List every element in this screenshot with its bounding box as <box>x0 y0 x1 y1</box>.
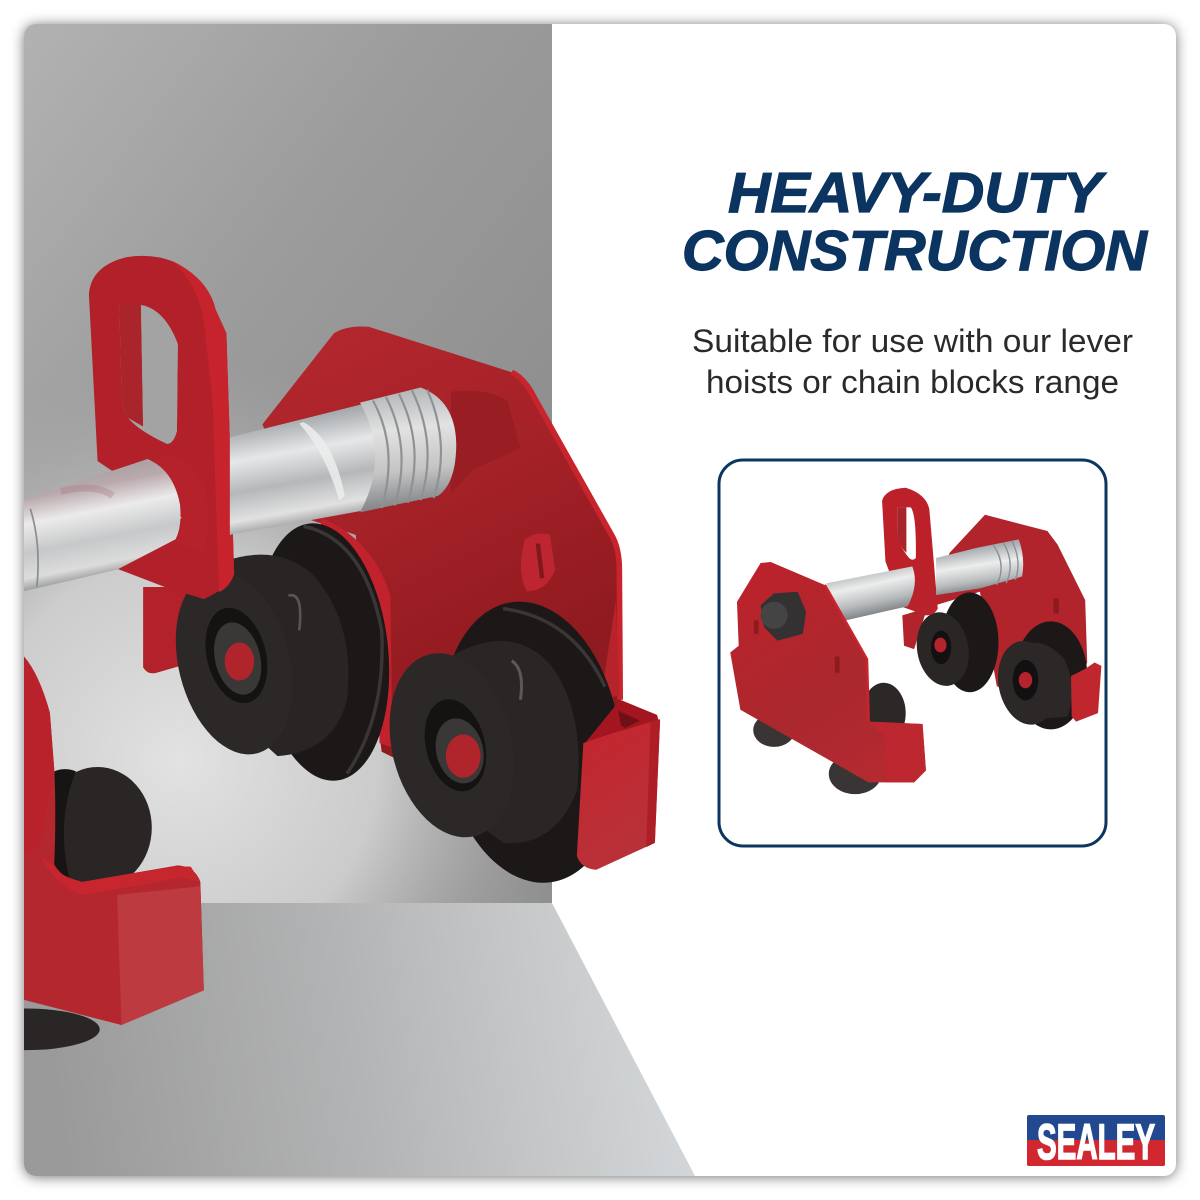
product close-up: girder trolley <box>0 256 660 1050</box>
back side plate <box>143 326 623 758</box>
inset: full product view <box>719 460 1106 846</box>
heading: HEAVY-DUTY <box>728 161 1107 225</box>
front lip <box>577 700 660 870</box>
front wheel <box>390 602 615 883</box>
description text <box>692 323 1133 400</box>
inset rear wheels <box>911 592 998 692</box>
inset back plate <box>902 515 1087 720</box>
rear wheel <box>176 523 390 781</box>
inset front wheel <box>992 621 1087 729</box>
inset front plate <box>730 562 926 782</box>
inset steel shaft <box>826 539 1023 622</box>
inset wheel lip <box>1071 663 1101 722</box>
inset plate slots <box>754 598 1059 673</box>
heading: CONSTRUCTION <box>682 219 1149 283</box>
steel shaft <box>24 387 456 591</box>
description text: Suitable for use with our lever <box>692 323 1133 359</box>
panel: studio background <box>24 24 695 1176</box>
description text: hoists or chain blocks range <box>706 364 1119 400</box>
inset near wheels <box>753 683 906 794</box>
left edge: near side plate and wheel <box>24 656 204 1050</box>
inset lifting eye <box>882 488 938 615</box>
heading <box>682 161 1149 283</box>
inset nut and bolt <box>761 592 806 641</box>
lifting eye bracket <box>89 256 234 599</box>
